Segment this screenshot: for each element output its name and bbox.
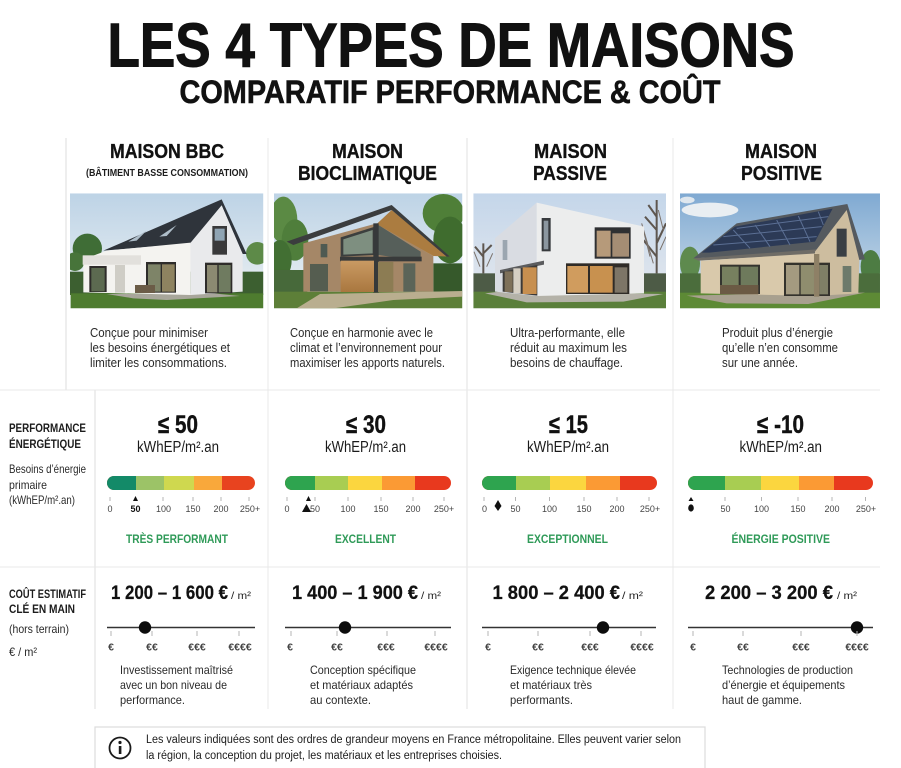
description: maison bioclimatique: maximiser les apports naturels. [290, 356, 445, 370]
heading: maison BBC [86, 141, 248, 179]
description: maison positive [722, 326, 838, 370]
description: maison passive [510, 326, 627, 370]
energy gauge: maison bioclimatique: ≤ 30 [346, 411, 386, 439]
energy gauge: maison passive: 100 [542, 504, 557, 514]
energy gauge: maison positive: kWhEP/m².an [740, 439, 822, 456]
callout: note: la région, la conception du projet, les matériaux et les entreprises choisies. [146, 750, 502, 762]
energy gauge: maison bioclimatique: 200 [405, 504, 421, 514]
cost block: maison passive: performants. [510, 693, 573, 707]
panel: maison passive [473, 141, 666, 370]
cost block: maison passive: €€€ [581, 642, 599, 654]
heading: maison passive: MAISON [534, 141, 607, 163]
description: maison BBC [90, 326, 230, 370]
cost block: maison positive: haut de gamme. [722, 693, 802, 707]
energy gauge: maison bioclimatique: 0 [284, 504, 290, 514]
icon: info [110, 738, 130, 758]
description: maison BBC: limiter les consommations. [90, 356, 227, 370]
energy gauge: maison passive: 150 [576, 504, 592, 514]
cost block: maison bioclimatique [285, 583, 451, 707]
cost block: maison passive: € [485, 642, 491, 654]
illustration: white cubic passive house [473, 193, 666, 308]
cost block: maison bioclimatique: et matériaux adaptés [310, 678, 413, 692]
energy gauge: maison positive: 250+ [856, 504, 876, 514]
energy gauge: maison passive: 250+ [640, 504, 660, 514]
cost block: maison passive: Exigence technique élevée [510, 663, 636, 677]
illustration: wooden house among trees [268, 193, 467, 308]
cost block: maison passive: 1 800 – 2 400 € [492, 583, 620, 604]
energy gauge: maison bioclimatique: 150 [373, 504, 389, 514]
subtitle: COMPARATIF PERFORMANCE & COÛT [180, 72, 721, 110]
cost block: maison passive: / m² [622, 591, 644, 602]
energy gauge: maison positive: 150 [790, 504, 806, 514]
energy gauge: maison passive: 200 [609, 504, 625, 514]
cost block: maison bioclimatique: 1 400 – 1 900 € [292, 583, 418, 604]
cost block: maison BBC [107, 583, 255, 707]
energy gauge: maison passive: ≤ 15 [549, 411, 588, 439]
energy gauge: maison positive: ÉNERGIE POSITIVE [732, 533, 830, 546]
row label: coût estimatif [9, 588, 86, 659]
heading: maison positive: MAISON [745, 141, 817, 163]
heading: maison bioclimatique [298, 141, 437, 185]
illustration: white house with dark roof [66, 193, 269, 308]
heading: maison positive: POSITIVE [741, 163, 822, 185]
description: maison bioclimatique: Conçue en harmonie avec le [290, 326, 433, 340]
energy gauge: maison BBC: 100 [156, 504, 171, 514]
cost block: maison BBC: €€€€ [228, 642, 252, 654]
heading: maison passive: PASSIVE [533, 163, 607, 185]
cost block: maison positive: d’énergie et équipements [722, 678, 845, 692]
row label: coût estimatif: € / m² [9, 645, 37, 659]
energy gauge: maison bioclimatique [284, 411, 454, 546]
cost block: maison passive: et matériaux très [510, 678, 592, 692]
description: maison positive: qu’elle n’en consomme [722, 341, 838, 355]
row label: coût estimatif: CLÉ EN MAIN [9, 603, 75, 616]
row label: coût estimatif: (hors terrain) [9, 622, 69, 636]
row label: coût estimatif: COÛT ESTIMATIF [9, 588, 86, 601]
cost block: maison bioclimatique: € [287, 642, 293, 654]
cost block: maison passive [482, 583, 656, 707]
energy gauge: maison bioclimatique: 50 [310, 504, 320, 514]
cost block: maison BBC: Investissement maîtrisé [120, 663, 233, 677]
illustration: house with solar panels [680, 193, 881, 308]
energy gauge: maison positive: 50 [720, 504, 731, 514]
heading: maison passive [533, 141, 607, 185]
cost block: maison BBC: € [108, 642, 114, 654]
description: maison bioclimatique: climat et l’environnement pour [290, 341, 442, 355]
energy gauge: maison positive: 200 [824, 504, 840, 514]
cost block: maison bioclimatique: / m² [421, 591, 442, 602]
description: maison BBC: les besoins énergétiques et [90, 341, 230, 355]
cost block: maison positive: €€€ [792, 642, 810, 654]
energy gauge: maison passive: 0 [482, 504, 487, 514]
energy gauge: maison BBC: kWhEP/m².an [137, 439, 219, 456]
energy gauge: maison passive: EXCEPTIONNEL [527, 534, 608, 546]
cost block: maison positive: / m² [837, 591, 858, 602]
cost block: maison passive: €€€€ [630, 642, 654, 654]
description: maison BBC: Conçue pour minimiser [90, 326, 208, 340]
energy gauge: maison passive: 50 [510, 504, 521, 514]
energy gauge: maison positive [688, 411, 876, 546]
heading: maison bioclimatique: MAISON [332, 141, 403, 163]
row label: performance énergétique: PERFORMANCE [9, 423, 86, 435]
cost block: maison bioclimatique: €€ [331, 642, 343, 654]
cost block: maison positive: € [690, 642, 696, 654]
panel: maison bioclimatique [268, 141, 467, 370]
cost block: maison passive: €€ [532, 642, 544, 654]
row label: performance énergétique: primaire [9, 478, 47, 492]
row label: performance énergétique: ÉNERGÉTIQUE [9, 438, 81, 451]
description: maison positive: sur une année. [722, 356, 798, 370]
cost block: maison BBC: avec un bon niveau de [120, 678, 227, 692]
energy gauge: maison BBC [107, 411, 260, 546]
heading: maison BBC: MAISON BBC [110, 141, 224, 163]
energy gauge: maison bioclimatique: kWhEP/m².an [325, 439, 406, 456]
energy gauge: maison BBC: 200 [213, 504, 229, 514]
heading: maison BBC: (BÂTIMENT BASSE CONSOMMATION) [86, 166, 248, 179]
cost block: maison BBC: 1 200 – 1 600 € [111, 583, 228, 604]
energy gauge: maison positive: ≤ -10 [757, 411, 804, 439]
energy gauge: maison bioclimatique: 250+ [434, 504, 454, 514]
energy gauge: maison BBC: 150 [185, 504, 201, 514]
cost block: maison positive: €€€€ [845, 642, 869, 654]
heading: maison positive [741, 141, 822, 185]
cost block: maison positive: 2 200 – 3 200 € [705, 583, 833, 604]
cost block: maison BBC: €€ [146, 642, 158, 654]
description: maison passive: réduit au maximum les [510, 341, 627, 355]
heading: maison bioclimatique: BIOCLIMATIQUE [298, 163, 437, 185]
energy gauge: maison BBC: 0 [107, 504, 113, 514]
energy gauge: maison BBC: 50 [130, 504, 141, 514]
energy gauge: maison passive [482, 411, 660, 546]
cost block: maison positive: €€ [737, 642, 749, 654]
cost block: maison BBC: €€€ [188, 642, 206, 654]
cost block: maison bioclimatique: €€€€ [424, 642, 448, 654]
description: maison passive: besoins de chauffage. [510, 356, 623, 370]
energy gauge: maison BBC: 250+ [240, 504, 260, 514]
energy gauge: maison positive: 100 [754, 504, 769, 514]
description: maison bioclimatique [290, 326, 445, 370]
callout: note [95, 727, 705, 768]
cost block: maison BBC: / m² [231, 591, 252, 602]
cost block: maison BBC: performance. [120, 693, 185, 707]
energy gauge: maison bioclimatique: 100 [340, 504, 356, 514]
description: maison passive: Ultra-performante, elle [510, 326, 625, 340]
row label: performance énergétique [9, 423, 86, 507]
description: maison positive: Produit plus d’énergie [722, 326, 833, 340]
row label: performance énergétique: (kWhEP/m².an) [9, 493, 75, 507]
cost block: maison positive: Technologies de production [722, 663, 853, 677]
title: LES 4 TYPES DE MAISONS [108, 12, 794, 80]
energy gauge: maison BBC: TRÈS PERFORMANT [126, 533, 228, 546]
row label: performance énergétique: Besoins d’énergie [9, 462, 86, 476]
energy gauge: maison bioclimatique: EXCELLENT [335, 534, 396, 546]
cost block: maison bioclimatique: au contexte. [310, 693, 371, 707]
cost block: maison bioclimatique: €€€ [377, 642, 395, 654]
callout: note: Les valeurs indiquées sont des ordres de grandeur moyens en France métropolitaine. Elles peuvent varier selon [146, 734, 681, 746]
energy gauge: maison BBC: ≤ 50 [158, 411, 198, 439]
panel: maison BBC [66, 141, 269, 370]
cost block: maison bioclimatique: Conception spécifique [310, 663, 416, 677]
panel: maison positive [680, 141, 881, 370]
energy gauge: maison passive: kWhEP/m².an [527, 439, 609, 456]
cost block: maison positive [688, 583, 873, 707]
